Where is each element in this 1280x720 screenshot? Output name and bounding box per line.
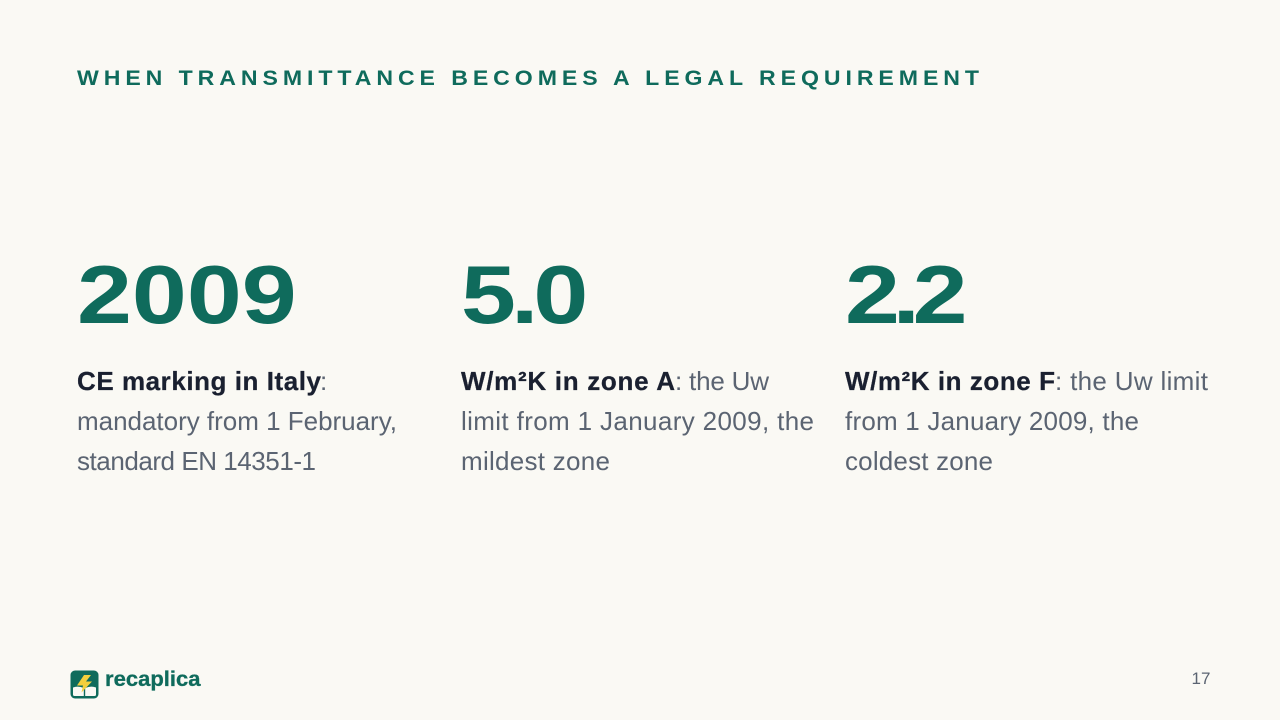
text block: CE marking description: CE marking in Italy [77, 366, 322, 396]
text block: CE marking description: : [320, 366, 327, 396]
text block: zone A description [461, 366, 814, 476]
big number: 2.2: 2.2 [845, 248, 968, 341]
icon: book with lightning bolt [70, 670, 98, 698]
panel: zone A limit 5.0 [461, 248, 814, 476]
text block: zone A description: mildest zone [461, 446, 610, 476]
page number: 17 [1192, 669, 1210, 688]
text block: zone A description: : the Uw [675, 366, 769, 396]
panel: CE marking 2009 [77, 248, 397, 476]
logo: recaplica [70, 667, 202, 698]
title: WHEN TRANSMITTANCE BECOMES A LEGAL REQUIREMENT [77, 66, 980, 90]
big number: 5.0: 5.0 [461, 248, 588, 341]
text block: CE marking description: mandatory from 1 February, [77, 406, 397, 436]
big number: 2009: 2009 [77, 248, 297, 341]
panel: zone F limit 2.2 [845, 248, 1209, 476]
text block: CE marking description [77, 366, 397, 476]
text block: zone F description: from 1 January 2009, the [845, 406, 1139, 436]
text block: zone F description: coldest zone [845, 446, 993, 476]
wordmark: recaplica [105, 667, 202, 691]
text block: zone A description: W/m²K in zone A [461, 366, 675, 396]
text block: zone F description: : the Uw limit [1055, 366, 1209, 396]
text block: zone A description: limit from 1 January 2009, the [461, 406, 814, 436]
text block: zone F description: W/m²K in zone F [845, 366, 1055, 396]
text block: CE marking description: standard EN 14351-1 [77, 446, 316, 476]
text block: zone F description [845, 366, 1209, 476]
